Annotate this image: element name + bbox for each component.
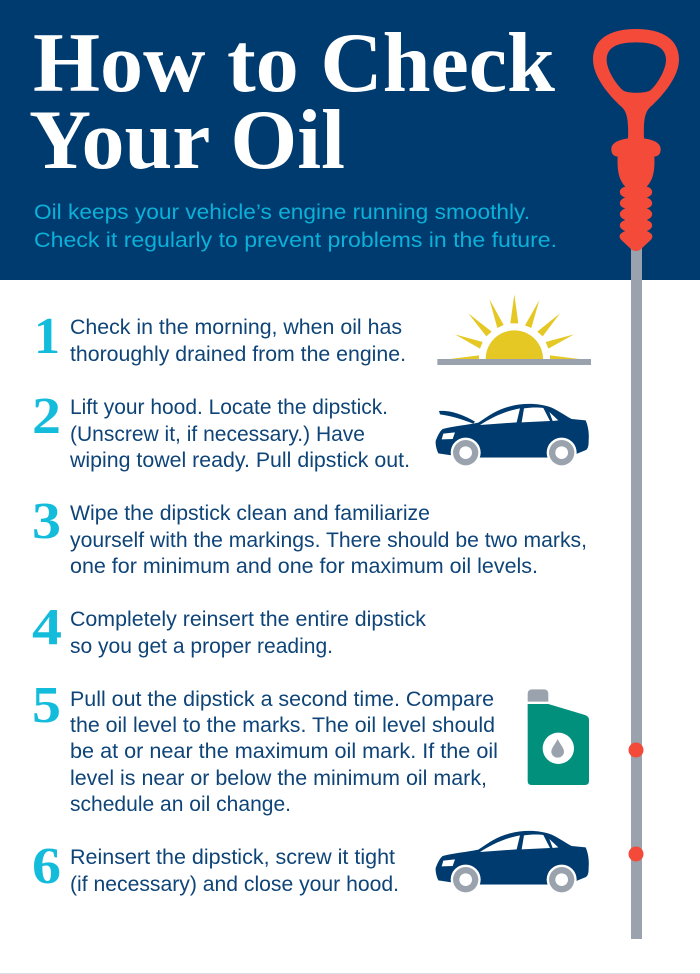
step 5: schedule an oil change.: [70, 792, 291, 816]
step 4: Completely reinsert the entire dipstick: [70, 607, 426, 631]
header panel: [0, 0, 700, 280]
step 5: be at or near the maximum oil mark. If the oil: [70, 739, 498, 763]
step 3: yourself with the markings. There should be two marks,: [70, 528, 587, 552]
step 4: so you get a proper reading.: [70, 634, 333, 658]
subtitle: Oil keeps your vehicle’s engine running smoothly.: [34, 200, 530, 224]
step 2: wiping towel ready. Pull dipstick out.: [69, 448, 410, 472]
dipstick mark: maximum: [628, 742, 644, 758]
step 1: Check in the morning, when oil has: [70, 315, 402, 339]
subtitle: Check it regularly to prevent problems in the future.: [34, 228, 557, 252]
step 1: [34, 308, 406, 366]
step 5: level is near or below the minimum oil mark,: [70, 766, 487, 790]
step 5: the oil level to the marks. The oil level should: [70, 713, 495, 737]
icon: car with open hood: [436, 404, 589, 472]
dipstick rod: [631, 248, 642, 939]
step 4: [32, 599, 426, 658]
title: How to Check: [33, 16, 556, 110]
step 3: 3: [32, 493, 61, 550]
icon: car with closed hood: [436, 831, 589, 899]
step 4: 4: [32, 599, 62, 656]
step 6: Reinsert the dipstick, screw it tight: [70, 845, 395, 869]
dipstick mark: minimum: [628, 846, 644, 862]
step 1: thoroughly drained from the engine.: [70, 342, 406, 366]
step 2: [32, 388, 410, 472]
step 2: Lift your hood. Locate the dipstick.: [70, 395, 388, 419]
title: Your Oil: [29, 93, 345, 187]
step 6: (if necessary) and close your hood.: [70, 872, 399, 896]
icon: sunrise: [437, 294, 591, 365]
step 5: 5: [32, 677, 61, 734]
step 3: Wipe the dipstick clean and familiarize: [70, 501, 430, 525]
step 2: 2: [32, 388, 61, 445]
step 1: 1: [34, 308, 60, 365]
dipstick handle: [593, 29, 679, 251]
step 2: (Unscrew it, if necessary.) Have: [70, 422, 365, 446]
step 3: [32, 493, 587, 578]
step 5: Pull out the dipstick a second time. Compare: [70, 687, 494, 711]
step 3: one for minimum and one for maximum oil levels.: [70, 554, 538, 578]
icon: oil bottle: [528, 689, 589, 785]
step 6: [32, 838, 399, 896]
step 5: [32, 677, 498, 816]
step 6: 6: [32, 838, 61, 895]
title: [29, 16, 556, 187]
subtitle: [34, 200, 557, 252]
